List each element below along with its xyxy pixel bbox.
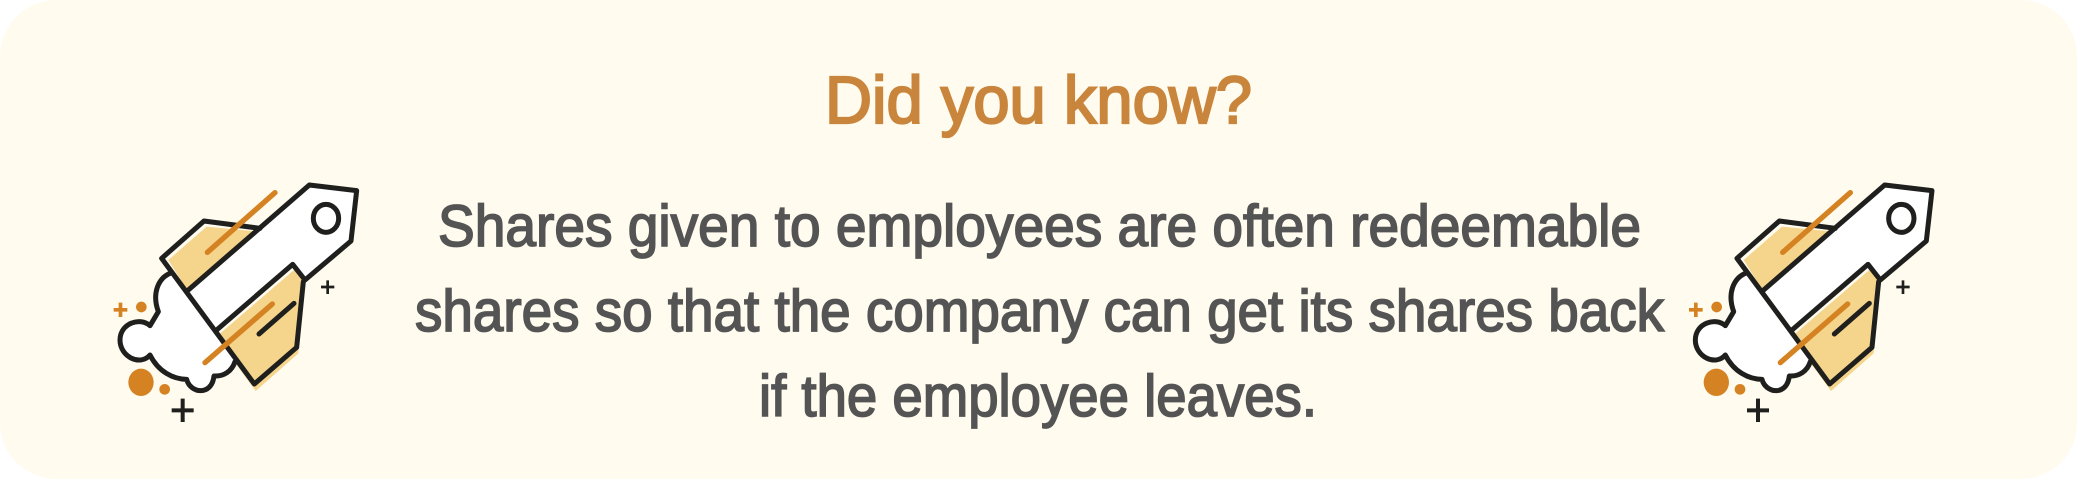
body text: Shares given to employees are often redeemable — [438, 194, 1641, 259]
icon: rocket right — [1689, 185, 1932, 422]
body text — [415, 194, 1665, 429]
title: Did you know? — [825, 63, 1252, 138]
body text: shares so that the company can get its shares back — [415, 279, 1665, 344]
body text: if the employee leaves. — [759, 364, 1317, 429]
icon: rocket left — [114, 185, 357, 422]
